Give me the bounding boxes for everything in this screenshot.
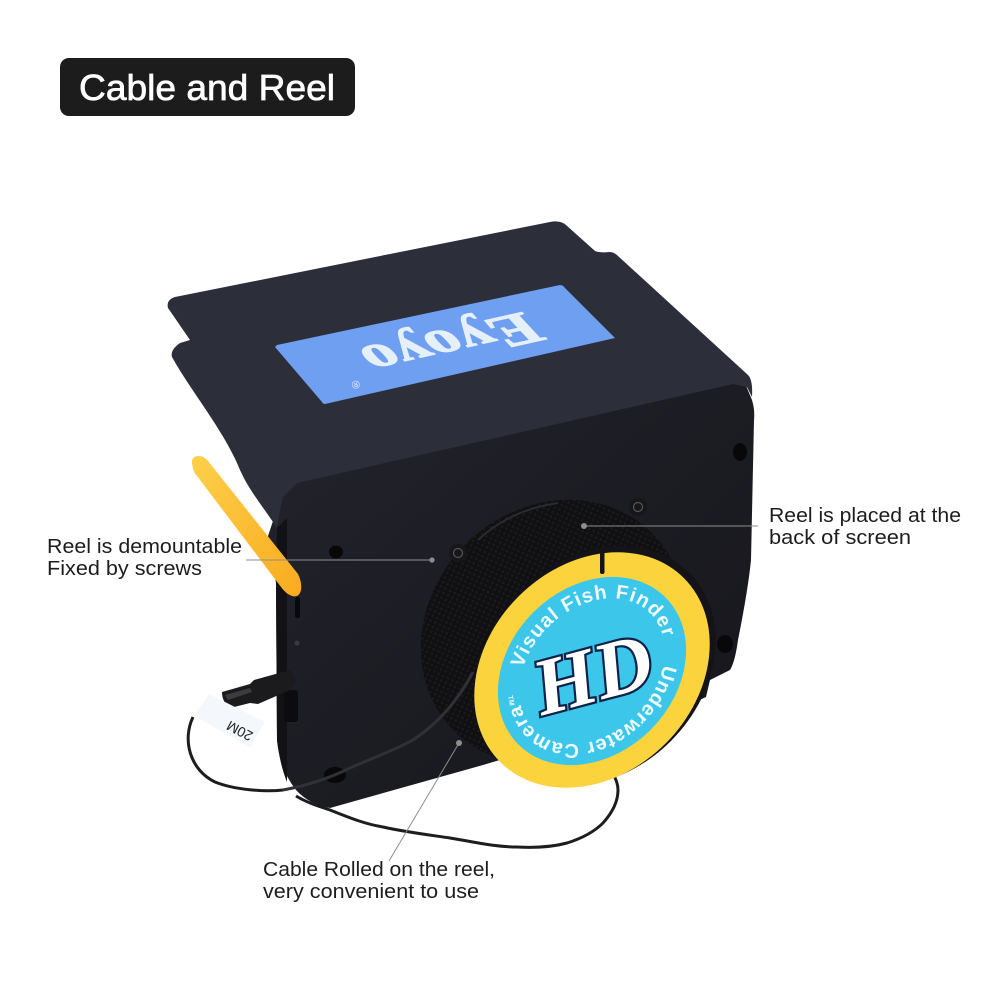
reel screw	[449, 544, 467, 562]
brand text: Eyoyo	[346, 302, 556, 385]
reel drum	[366, 445, 740, 819]
side ports	[284, 597, 300, 722]
cable label tag	[194, 694, 265, 747]
reel disc	[474, 552, 713, 788]
cable: left loop	[188, 717, 283, 791]
visor brand plate	[275, 285, 615, 404]
title: Cable and Reel	[79, 67, 335, 108]
sun visor	[168, 221, 752, 528]
disc rim	[428, 498, 764, 834]
callout: cable rolled on reel	[263, 740, 495, 903]
reel screw	[629, 498, 647, 516]
text: Visual Fish Finder: Visual Fish Finder	[510, 584, 674, 664]
callout: reel is demountable: Reel is demountable	[47, 535, 242, 558]
registered mark: ®	[350, 377, 361, 391]
disc notch	[600, 550, 604, 574]
HD logo: HD	[523, 617, 662, 733]
callout: reel is demountable	[47, 535, 435, 580]
screen body	[268, 376, 754, 808]
callout: reel placement: back of screen	[769, 526, 911, 549]
callout: reel is demountable: Fixed by screws	[47, 557, 202, 580]
title	[60, 58, 355, 116]
callout: cable rolled on reel: Cable Rolled on the reel,	[263, 858, 495, 881]
text: Underwater Camera: Underwater Camera	[512, 667, 677, 758]
reel flange highlight	[478, 503, 558, 540]
cable: lower loop	[296, 771, 618, 847]
disc curved text	[510, 584, 677, 758]
callout: cable rolled on reel: very convenient to use	[263, 880, 479, 903]
cable connector	[222, 670, 297, 708]
mounting holes	[324, 443, 747, 783]
side edge	[276, 518, 287, 782]
icon: yellow pry tool	[192, 456, 301, 596]
yellow ring	[427, 505, 757, 835]
cable: across body	[283, 672, 473, 790]
product: fish finder screen unit	[168, 221, 754, 808]
trademark: TM	[506, 695, 515, 706]
cyan face	[460, 539, 724, 803]
cable label tag: 20M	[224, 718, 255, 744]
callout: reel placement	[581, 504, 961, 549]
callout: reel placement: Reel is placed at the	[769, 504, 961, 527]
